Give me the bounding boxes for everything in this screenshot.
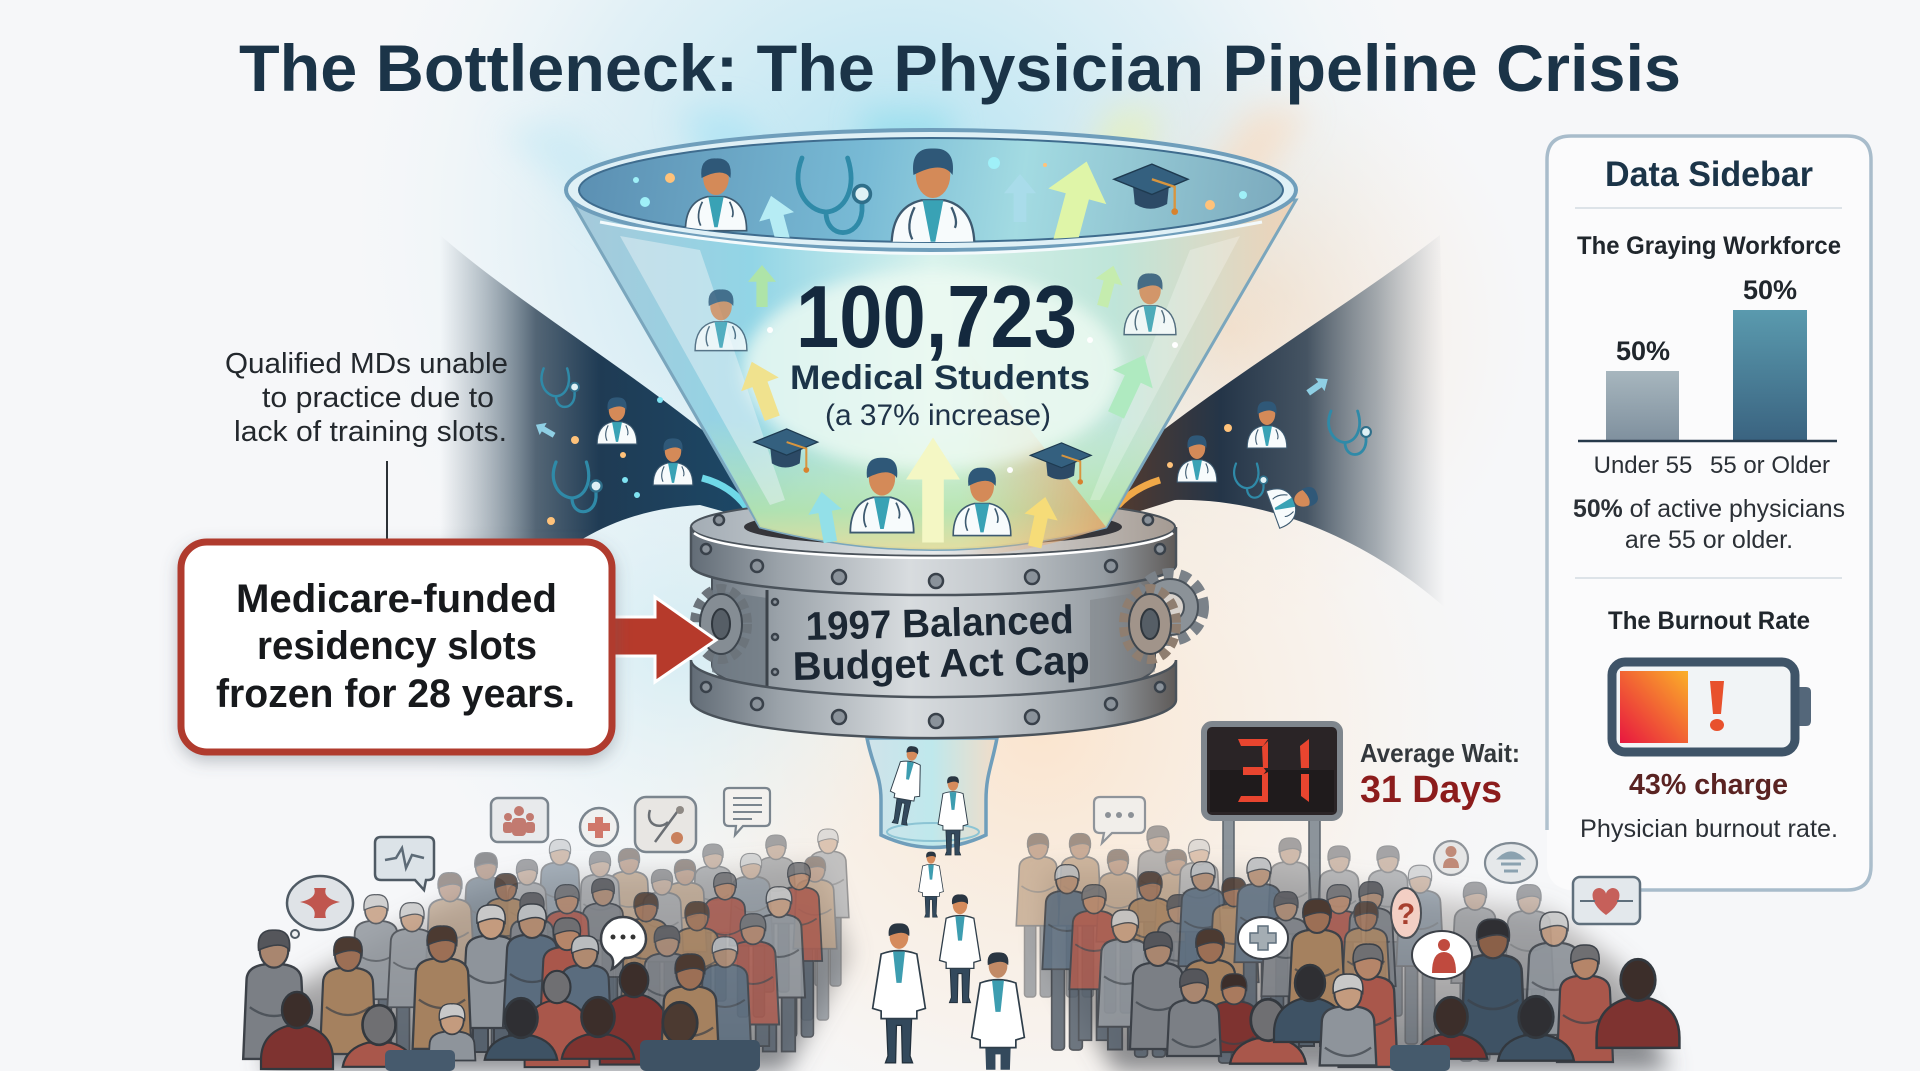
- bar chart: 50%: [1743, 275, 1797, 305]
- big number: 100,723: [796, 267, 1077, 366]
- burnout heading: The Burnout Rate: [1608, 607, 1810, 635]
- main doctor: [873, 923, 925, 1063]
- crowd shadow mass: [265, 862, 850, 1071]
- bubble: plus cloud: [1238, 917, 1288, 959]
- bubble: list: [724, 788, 770, 835]
- callout: frozen slots: Medicare-funded: [236, 577, 557, 621]
- lower ring: [691, 660, 1176, 738]
- middle row: [351, 863, 822, 1069]
- qualified MDs note: lack of training slots.: [234, 416, 507, 448]
- right doctor: [972, 952, 1024, 1070]
- icon: arrow lower right: [1018, 494, 1062, 550]
- funnel rim: [566, 130, 1296, 250]
- callout: frozen slots: [181, 542, 612, 752]
- increase note: (a 37% increase): [825, 399, 1051, 432]
- back row: [425, 829, 849, 1058]
- icon: cone arrow right top: [1089, 262, 1127, 310]
- leader line: [386, 461, 388, 540]
- doctors emerging: [873, 852, 1024, 1070]
- average wait label: [1360, 738, 1520, 811]
- title: The Bottleneck: The Physician Pipeline Crisis: [239, 31, 1681, 105]
- bubble: white ellipsis: [601, 917, 646, 969]
- icon: cone arrow yellow: [733, 355, 791, 425]
- left dark wing with escaping doctors: [430, 235, 790, 575]
- icon: doctor ghost right: [1124, 273, 1176, 335]
- icon: doctor bust right: [1247, 401, 1287, 448]
- icon: doctor bust left: [597, 397, 637, 444]
- wait timer: [1204, 724, 1340, 908]
- icon: falling doctor two: [938, 776, 968, 855]
- bubble: heart monitor: [1573, 877, 1640, 924]
- burnout value: 43% charge: [1629, 769, 1788, 801]
- qualified MDs note: to practice due to: [262, 382, 494, 414]
- bubble: red cross: [580, 808, 618, 846]
- front row: [1130, 899, 1679, 1071]
- rear doctor: [940, 894, 980, 1003]
- icon: graduation cap lower left: [754, 429, 818, 473]
- right dark wing with escaping doctors: [1080, 235, 1450, 612]
- qualified MDs note: Qualified MDs unable: [225, 348, 508, 380]
- icon: back gear: [1138, 575, 1202, 639]
- icon: upper stethoscope right: [1329, 411, 1371, 454]
- icon: stethoscope lower left: [553, 462, 602, 512]
- icon: curved cyan arrow: [702, 478, 762, 540]
- bar chart: 50%: [1616, 336, 1670, 366]
- icon: doctor bust lower right: [1177, 435, 1217, 482]
- back row: [1016, 826, 1554, 1061]
- icon: falling doctor one: [885, 744, 928, 827]
- icon: small arrow left: [532, 419, 558, 441]
- glass funnel: [566, 130, 1296, 556]
- middle row: [1042, 858, 1583, 1067]
- bubble: ellipsis: [1094, 797, 1145, 843]
- timer posts: [1223, 818, 1320, 908]
- icon: left gear: [695, 589, 747, 659]
- icon: doctor top left: [685, 158, 747, 231]
- rim icons: [633, 148, 1247, 242]
- callout: frozen slots: residency slots: [257, 624, 537, 668]
- panel: data sidebar: [1547, 136, 1871, 890]
- bar chart: Under 55: [1594, 452, 1692, 479]
- bubble: question: ?: [1397, 898, 1415, 931]
- icon: stethoscope upper left: [542, 368, 579, 407]
- icon: arrow top green: [1048, 162, 1106, 239]
- collar plate: [712, 570, 1155, 705]
- icon: central pale arrow: [906, 438, 960, 542]
- bubble: cross cloud: [287, 876, 353, 938]
- icon: right gear: [1124, 589, 1176, 659]
- subtitle: Medical Students: [790, 359, 1090, 397]
- icon: curved orange arrow: [1095, 480, 1160, 548]
- icon: central doctor: [892, 149, 974, 246]
- burnout caption: Physician burnout rate.: [1580, 815, 1838, 843]
- graying note: are 55 or older.: [1625, 526, 1793, 554]
- bar chart: 55 or Older: [1710, 452, 1830, 479]
- bubble: question: [1391, 888, 1421, 938]
- upper ring: [691, 527, 1176, 595]
- icon: doctor bust lower left: [653, 438, 693, 485]
- steel collar: [691, 515, 1202, 738]
- icon: graduation cap top right: [1114, 164, 1188, 215]
- average wait label: Average Wait:: [1360, 738, 1520, 768]
- graying note: 50% of active physicians: [1573, 495, 1845, 523]
- bubble: person cloud: [1412, 931, 1472, 979]
- bubble: stethoscope box: [635, 797, 696, 852]
- funnel cone: [571, 200, 1296, 550]
- icon: arrow lower left: [805, 489, 847, 545]
- funnel count: [790, 267, 1090, 432]
- plate label: Budget Act Cap: [792, 639, 1090, 689]
- icon: arrow top left: [759, 196, 794, 238]
- crowd right: [1016, 797, 1679, 1071]
- callout: frozen slots: frozen for 28 years.: [216, 672, 575, 716]
- icon: cone arrow left top: [748, 265, 776, 307]
- bubble: burger lines: [1485, 843, 1537, 883]
- front row: [243, 904, 760, 1071]
- collar back and hole: [691, 498, 1175, 556]
- timer display: [1204, 724, 1340, 818]
- small doctor below spout: [919, 852, 943, 917]
- sidebar heading: Data Sidebar: [1605, 155, 1813, 194]
- plate label: 1997 Balanced: [805, 598, 1074, 649]
- icon: doctor ghost left: [695, 289, 747, 351]
- icon: doctor lower centre right: [953, 468, 1011, 536]
- icon: arrow top pale: [1004, 174, 1036, 222]
- crowd left: [243, 788, 850, 1071]
- graying workforce heading: The Graying Workforce: [1577, 232, 1841, 260]
- icon: stethoscope top: [798, 158, 870, 233]
- icon: fading doctor bust right: [1266, 475, 1324, 528]
- red seven segment digits: [1238, 739, 1309, 802]
- rim lip highlight: [600, 222, 1262, 254]
- crowd shadow mass: [1045, 870, 1670, 1071]
- bubble: person circle: [1434, 841, 1468, 875]
- graying note: [1573, 495, 1845, 554]
- rivets: [701, 515, 1165, 728]
- icon: graduation cap lower right: [1030, 443, 1091, 485]
- glass spout with falling doctors: [867, 738, 997, 855]
- icon: cone arrow green: [1096, 346, 1164, 424]
- icon: battery: [1612, 662, 1811, 752]
- bubble: people: [491, 798, 548, 842]
- plate label: [792, 598, 1090, 689]
- icon: doctor lower centre left: [850, 458, 914, 533]
- icon: small arrow right: [1304, 373, 1332, 399]
- cone icons: [695, 262, 1178, 550]
- bubble: pulse box: [375, 837, 434, 890]
- icon: stethoscope right: [1234, 464, 1267, 498]
- bar chart: [1578, 275, 1837, 479]
- qualified MDs note: [225, 348, 508, 448]
- arrow to collar: [610, 597, 716, 682]
- average wait label: 31 Days: [1360, 769, 1502, 811]
